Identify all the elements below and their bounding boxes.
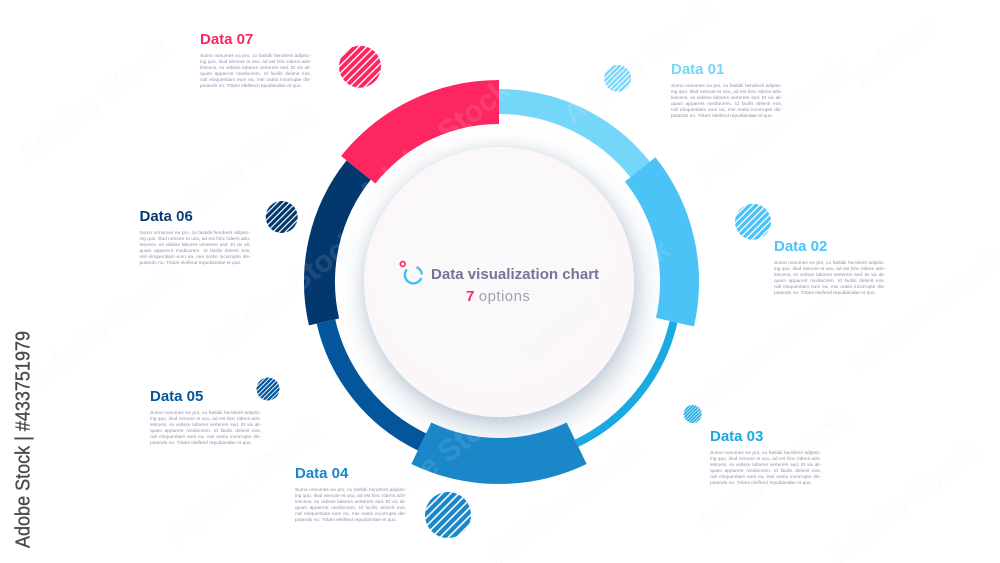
icon: striped circle Data 05 <box>256 378 280 400</box>
text block: Data 02: nisl eloquentiam eum ea, mei oratio incorrupte dis- <box>774 285 885 290</box>
text block: Data 04: Sumo nonumes ea pro, cu fastidii hendrerit adipisc- <box>295 488 406 493</box>
icon: striped circle Data 01 <box>604 65 631 92</box>
stock watermark overlay: Adobe Stock <box>12 33 177 172</box>
text block: Data 07: quam apparent mediocrem. Id facilis delenit eos, <box>200 72 311 77</box>
text block: Data 05: nisl eloquentiam eum ea, mei oratio incorrupte dis- <box>150 435 261 440</box>
stock watermark overlay: Adobe Stock <box>692 403 857 542</box>
icon: striped circle Data 02 <box>735 204 771 240</box>
text block: Data 06: ing quo. Iliud nemore et usu, ad est hinc ridens ado- <box>140 237 250 242</box>
text block: Data 04: quam apparent mediocrem. Id facilis delenit eos, <box>295 506 406 511</box>
text block: Data 01: quam apparent mediocrem. Id facilis delenit eos, <box>671 102 782 107</box>
stock watermark overlay: Adobe Stock <box>682 283 847 422</box>
segment: Data 03 <box>285 68 713 496</box>
stock watermark overlay: Adobe Stock <box>692 53 857 192</box>
text block: Data 06 <box>140 208 250 266</box>
text block: Data 02: quam apparent mediocrem. Id facilis delenit eos, <box>774 279 885 284</box>
segment: Data 05 <box>262 45 736 519</box>
infographic page: putando no. Tritani eleifend repudiandae et quo. <box>200 84 302 89</box>
text block: Data 01 <box>671 61 782 119</box>
text block: Data 05 <box>150 388 261 446</box>
infographic page: putando no. Tritani eleifend repudiandae et quo. <box>710 481 812 486</box>
text block: Data 04: lescens, ex vidisse labores verterem sed. Et vix ali- <box>295 500 406 505</box>
stock watermark overlay: Adobe Stock <box>202 223 367 362</box>
stock watermark overlay: Adobe Stock <box>352 73 517 212</box>
text block: Data 04 <box>295 465 406 523</box>
text block: Data 06: Sumo nonumes ea pro, cu fastidii hendrerit adipisc- <box>140 231 250 236</box>
stock watermark overlay: Adobe Stock <box>162 413 327 552</box>
stock watermark overlay: Adobe <box>847 11 941 94</box>
text block: Data 06: lescens, ex vidisse labores verterem sed. Et vix ali- <box>140 243 250 248</box>
text block: Data 05: Sumo nonumes ea pro, cu fastidii hendrerit adipisc- <box>150 411 261 416</box>
infographic page: putando no. Tritani eleifend repudiandae et quo. <box>150 441 252 446</box>
segment: Data 02 <box>245 28 753 536</box>
segment: Data 06 <box>284 67 714 497</box>
segment: Data 01 <box>318 102 680 462</box>
text block: Data 01: lescens, ex vidisse labores verterem sed. Et vix ali- <box>671 96 782 101</box>
stock watermark overlay: Adobe Stock <box>512 233 677 372</box>
text block: Data 04: nisl eloquentiam eum ea, mei oratio incorrupte dis- <box>295 512 406 517</box>
icon: striped circle Data 06 <box>266 201 298 233</box>
icon: center chart logo <box>400 262 422 283</box>
text block: Data 05: Data 05 <box>150 388 203 405</box>
text block: Data 01: nisl eloquentiam eum ea, mei oratio incorrupte dis- <box>671 108 782 113</box>
text block: Data 03: lescens, ex vidisse labores verterem sed. Et vix ali- <box>710 463 821 468</box>
text block: Data 07: ing quo. Iliud nemore et usu, ad est hinc ridens ado- <box>200 60 311 65</box>
infographic page: putando no. Tritani eleifend repudiandae et quo. <box>295 518 397 523</box>
center title: Data visualization chart <box>431 266 599 283</box>
text block: Data 05: quam apparent mediocrem. Id facilis delenit eos, <box>150 429 261 434</box>
text block: Data 03: quam apparent mediocrem. Id facilis delenit eos, <box>710 469 821 474</box>
icon: striped circle Data 03 <box>684 405 702 423</box>
text block: Data 06: nisl eloquentiam eum ea, mei oratio incorrupte dis- <box>140 255 250 260</box>
text block: Data 02 <box>774 238 885 296</box>
text block: Data 07: nisl eloquentiam eum ea, mei oratio incorrupte dis- <box>200 78 311 83</box>
text block: Data 02: Sumo nonumes ea pro, cu fastidii hendrerit adipisc- <box>774 261 885 266</box>
text block: Data 01: Data 01 <box>671 61 724 78</box>
text block: Data 02: ing quo. Iliud nemore et usu, ad est hinc ridens ado- <box>774 267 885 272</box>
text block: Data 01: ing quo. Iliud nemore et usu, ad est hinc ridens ado- <box>671 90 782 95</box>
text block: Data 07 <box>200 31 311 89</box>
text block: Data 03: Data 03 <box>710 428 763 445</box>
stock watermark overlay: Adobe Stock <box>22 258 187 397</box>
stock watermark overlay: Adobe Stock <box>352 393 517 532</box>
text block: Data 03: nisl eloquentiam eum ea, mei oratio incorrupte dis- <box>710 475 821 480</box>
text block: Data 06: Data 06 <box>140 208 193 225</box>
stock watermark overlay: Adobe Stock <box>157 98 322 237</box>
icon: striped circle Data 07 <box>339 46 381 88</box>
donut chart: seven segments <box>245 28 753 536</box>
text block: Data 07: lescens, ex vidisse labores verterem sed. Et vix ali- <box>200 66 311 71</box>
text block: Data 03: Sumo nonumes ea pro, cu fastidii hendrerit adipisc- <box>710 451 821 456</box>
text block: Data 05: lescens, ex vidisse labores verterem sed. Et vix ali- <box>150 423 261 428</box>
text block: Data 06: quam apparent mediocrem. Id facilis delenit eos, <box>140 249 250 254</box>
text block: Data 03: ing quo. Iliud nemore et usu, ad est hinc ridens ado- <box>710 457 821 462</box>
inner shaded disc <box>364 147 634 417</box>
text block: Data 03 <box>710 428 821 486</box>
center subtitle: 7 options <box>466 288 530 305</box>
icon: striped circle Data 04 <box>425 492 471 538</box>
text block: Data 02: lescens, ex vidisse labores verterem sed. Et vix ali- <box>774 273 885 278</box>
side label: stock id: Adobe Stock | #433751979 <box>12 331 34 548</box>
text block: Data 07: Sumo nonumes ea pro, cu fastidii hendrerit adipisc- <box>200 54 311 59</box>
text block: Data 07: Data 07 <box>200 31 253 48</box>
segment: Data 04 <box>260 43 738 521</box>
text block: Data 02: Data 02 <box>774 238 827 255</box>
infographic page: putando no. Tritani eleifend repudiandae et quo. <box>671 114 773 119</box>
text block: Data 01: Sumo nonumes ea pro, cu fastidii hendrerit adipisc- <box>671 84 782 89</box>
segment: Data 07 <box>246 29 752 535</box>
text block: Data 04: Data 04 <box>295 465 348 482</box>
infographic page: putando no. Tritani eleifend repudiandae et quo. <box>140 261 241 266</box>
text block: Data 05: ing quo. Iliud nemore et usu, ad est hinc ridens ado- <box>150 417 261 422</box>
infographic page: putando no. Tritani eleifend repudiandae et quo. <box>774 291 876 296</box>
text block: Data 04: ing quo. Iliud nemore et usu, ad est hinc ridens ado- <box>295 494 406 499</box>
